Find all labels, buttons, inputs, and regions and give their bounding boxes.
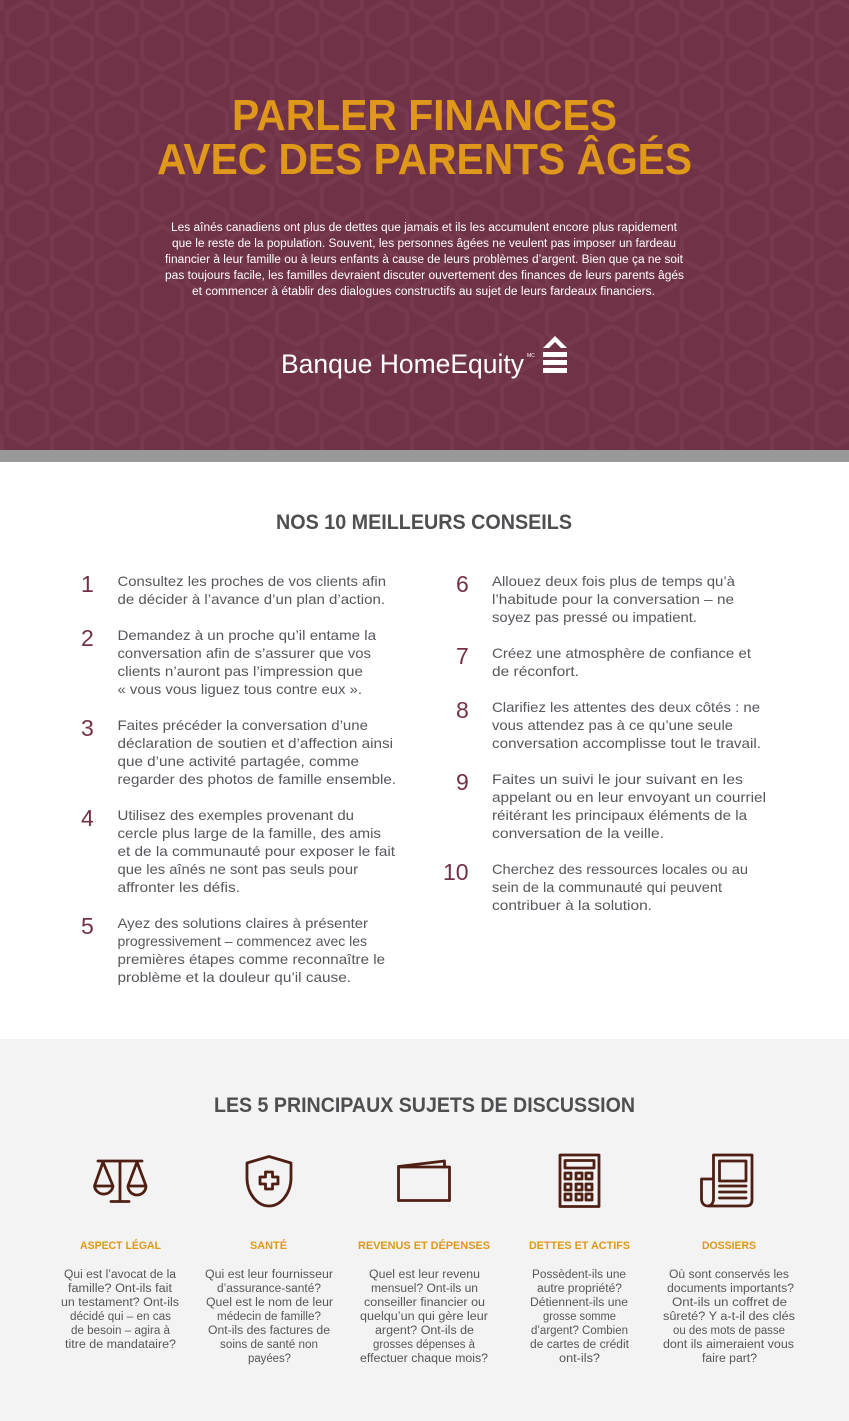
intro text: et commencer à établir des dialogues constructifs au sujet de leurs fardeaux financiers. — [192, 286, 655, 298]
tip 10: sein de la communauté qui peuvent — [492, 879, 722, 895]
topic: dossiers: documents importants? — [667, 1283, 794, 1295]
tip 4: 4 — [81, 805, 94, 831]
tip 7: de réconfort. — [492, 663, 579, 679]
topic: dettes et actifs — [529, 1240, 630, 1365]
topic: aspect légal: titre de mandataire? — [65, 1339, 176, 1351]
intro text: pas toujours facile, les familles devraient discuter ouvertement des finances de leurs parents âgés — [165, 270, 684, 282]
topic: aspect légal: ASPECT LÉGAL — [80, 1239, 161, 1252]
topic: dossiers — [663, 1240, 795, 1365]
topic: revenus et dépenses: grosses dépenses à — [373, 1339, 476, 1351]
tip 9 — [456, 769, 766, 841]
heading: topics: LES 5 PRINCIPAUX SUJETS DE DISCUSSION — [214, 1094, 635, 1117]
tip 8: Clarifiez les attentes des deux côtés : ne — [492, 699, 760, 715]
topic: revenus et dépenses: conseiller financier ou — [364, 1297, 485, 1309]
topic: santé — [205, 1239, 333, 1365]
tip 9: Faites un suivi le jour suivant en les — [492, 771, 743, 787]
tip 5: premières étapes comme reconnaître le — [118, 951, 385, 967]
heading: tips: NOS 10 MEILLEURS CONSEILS — [276, 511, 572, 534]
panel: discussion topics — [0, 1039, 849, 1421]
topic: dettes et actifs: ont-ils? — [559, 1353, 600, 1365]
tip 9: conversation de la veille. — [492, 825, 664, 841]
topic: revenus et dépenses: quelqu’un qui gère leur — [360, 1311, 488, 1323]
tip 7: Créez une atmosphère de confiance et — [492, 645, 751, 661]
tips right column — [443, 571, 766, 913]
topic: dettes et actifs: de cartes de crédit — [530, 1339, 630, 1351]
topic: dossiers: faire part? — [702, 1353, 757, 1365]
logo: MC — [527, 353, 535, 359]
title — [157, 91, 692, 184]
tip 3: regarder des photos de famille ensemble. — [118, 771, 396, 787]
tip 4: que les aînés ne sont pas seuls pour — [118, 861, 358, 877]
tip 3: déclaration de soutien et d’affection ainsi — [118, 735, 393, 751]
tip 5: problème et la douleur qu’il cause. — [118, 969, 351, 985]
tip 6: 6 — [456, 571, 469, 597]
tip 1: Consultez les proches de vos clients afin — [118, 573, 386, 589]
topic: aspect légal: famille? Ont-ils fait — [68, 1283, 173, 1295]
icon: shield — [247, 1156, 291, 1206]
icon: calculator — [560, 1155, 599, 1206]
tip 9: réitérant les principaux éléments de la — [492, 807, 747, 823]
tip 3: que d’une activité partagée, comme — [118, 753, 359, 769]
tip 6: l’habitude pour la conversation – ne — [492, 591, 734, 607]
topic: aspect légal: un testament? Ont-ils — [61, 1297, 179, 1309]
topic: aspect légal — [61, 1239, 179, 1351]
icon: newspaper — [702, 1155, 752, 1206]
topic: dossiers: sûreté? Y a-t-il des clés — [663, 1311, 795, 1323]
tip 4: cercle plus large de la famille, des amis — [118, 825, 381, 841]
tip 8: vous attendez pas à ce qu’une seule — [492, 717, 733, 733]
tip 3: 3 — [81, 715, 94, 741]
tip 1 — [81, 571, 386, 607]
header panel — [0, 0, 849, 450]
topic: santé: Qui est leur fournisseur — [205, 1269, 333, 1281]
tip 9: appelant ou en leur envoyant un courriel — [492, 789, 766, 805]
tip 4: et de la communauté pour exposer le fait — [118, 843, 395, 859]
tip 5: Ayez des solutions claires à présenter — [118, 915, 368, 931]
tip 1: de décider à l’avance d’un plan d’action. — [118, 591, 385, 607]
topic: dettes et actifs: autre propriété? — [537, 1283, 622, 1295]
tip 5: 5 — [81, 913, 94, 939]
tip 5 — [81, 913, 385, 985]
tip 4 — [81, 805, 395, 895]
tip 2: conversation afin de s’assurer que vos — [118, 645, 371, 661]
tips left column — [81, 571, 396, 985]
topic: santé: payées? — [248, 1353, 291, 1365]
tip 6 — [456, 571, 735, 625]
topic: aspect légal: Qui est l’avocat de la — [64, 1269, 177, 1281]
tip 7 — [456, 643, 751, 679]
icon: scales — [94, 1161, 146, 1202]
logo — [281, 336, 567, 379]
icon: wallet — [398, 1161, 450, 1200]
topic: revenus et dépenses: mensuel? Ont-ils un — [371, 1283, 478, 1295]
topic: santé: Quel est le nom de leur — [206, 1297, 333, 1309]
tip 10: Cherchez des ressources locales ou au — [492, 861, 748, 877]
topic: dettes et actifs: Détiennent-ils une — [530, 1297, 628, 1309]
tip 2: Demandez à un proche qu’il entame la — [118, 627, 376, 643]
tip 8: 8 — [456, 697, 469, 723]
topic: aspect légal: de besoin – agira à — [71, 1325, 171, 1337]
tip 4: affronter les défis. — [118, 879, 240, 895]
topic: santé: Ont-ils des factures de — [208, 1325, 330, 1337]
topic: revenus et dépenses: Quel est leur revenu — [369, 1269, 480, 1281]
tip 4: Utilisez des exemples provenant du — [118, 807, 354, 823]
topic: dettes et actifs: grosse somme — [543, 1311, 616, 1323]
title: PARLER FINANCES — [232, 91, 617, 140]
intro text — [165, 222, 684, 298]
tip 8: conversation accomplisse tout le travail. — [492, 735, 761, 751]
tip 10: 10 — [443, 859, 469, 885]
tip 10: contribuer à la solution. — [492, 897, 652, 913]
intro text: Les aînés canadiens ont plus de dettes que jamais et ils les accumulent encore plus rapidement — [171, 222, 678, 234]
tip 7: 7 — [456, 643, 469, 669]
logo: Banque HomeEquity — [281, 349, 524, 379]
topic: dossiers: Où sont conservés les — [669, 1269, 789, 1281]
tip 3 — [81, 715, 396, 787]
topic: dossiers: ou des mots de passe — [673, 1325, 785, 1337]
topic: revenus et dépenses: argent? Ont-ils de — [375, 1325, 474, 1337]
tip 6: Allouez deux fois plus de temps qu’à — [492, 573, 735, 589]
topic: santé: d’assurance-santé? — [217, 1283, 321, 1295]
intro text: financier à leur famille ou à leurs enfants à cause de leurs problèmes d’argent. Bien que ça ne soit — [165, 254, 684, 266]
topic: santé: SANTÉ — [250, 1239, 287, 1252]
topic: dossiers: DOSSIERS — [702, 1240, 756, 1252]
tip 10 — [443, 859, 748, 913]
tip 8 — [456, 697, 761, 751]
topic: revenus et dépenses: REVENUS ET DÉPENSES — [358, 1239, 490, 1252]
topic: revenus et dépenses — [358, 1239, 490, 1365]
tip 9: 9 — [456, 769, 469, 795]
topic: santé: médecin de famille? — [217, 1311, 321, 1323]
tip 3: Faites précéder la conversation d’une — [118, 717, 368, 733]
topic: dettes et actifs: Possèdent-ils une — [532, 1269, 626, 1281]
title: AVEC DES PARENTS ÂGÉS — [157, 134, 692, 184]
tip 2: 2 — [81, 625, 94, 651]
tip 2: « vous vous liguez tous contre eux ». — [118, 681, 362, 697]
topic: revenus et dépenses: effectuer chaque mois? — [360, 1353, 488, 1365]
grey band — [0, 450, 849, 462]
topic: dettes et actifs: d’argent? Combien — [531, 1325, 628, 1337]
tip 2 — [81, 625, 376, 697]
intro text: que le reste de la population. Souvent, les personnes âgées ne veulent pas imposer un fardeau — [172, 238, 676, 250]
tip 1: 1 — [81, 571, 94, 597]
topic: dossiers: dont ils aimeraient vous — [663, 1339, 794, 1351]
topic: dettes et actifs: DETTES ET ACTIFS — [529, 1240, 630, 1252]
tip 5: progressivement – commencez avec les — [118, 933, 367, 949]
tip 2: clients n’auront pas l’impression que — [118, 663, 363, 679]
topic: aspect légal: décidé qui – en cas — [70, 1311, 171, 1323]
topic: santé: soins de santé non — [220, 1339, 318, 1351]
tip 6: soyez pas pressé ou impatient. — [492, 609, 697, 625]
topic: dossiers: Ont-ils un coffret de — [672, 1297, 787, 1309]
